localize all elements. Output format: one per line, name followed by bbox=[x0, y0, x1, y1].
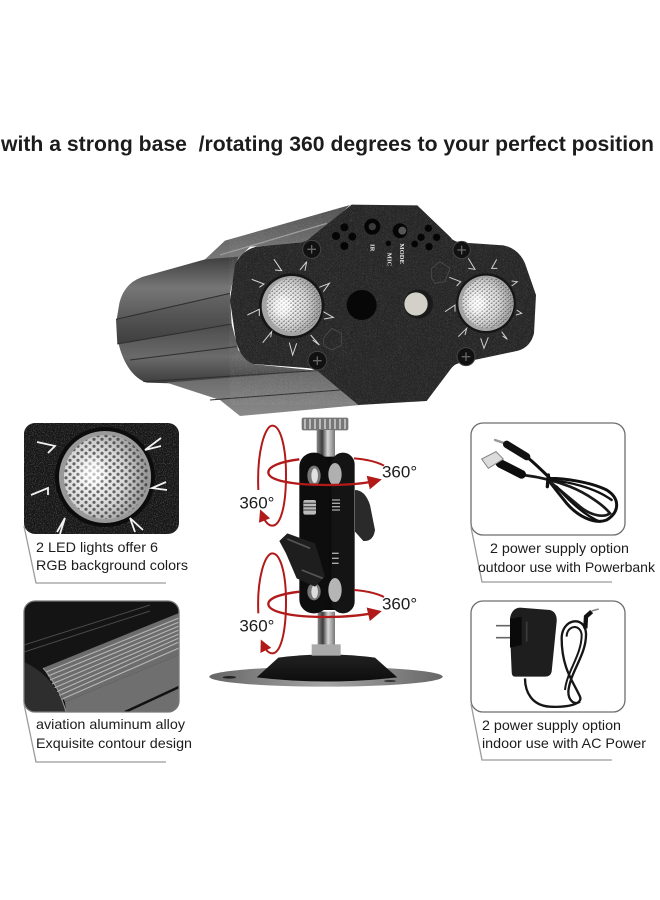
360 degree labels: 360° bbox=[239, 493, 274, 512]
caption: 2 power supply option bbox=[490, 540, 629, 556]
aluminium body bbox=[116, 205, 360, 416]
leader line bbox=[471, 527, 612, 582]
base plate bbox=[209, 654, 443, 687]
caption: indoor use with AC Power bbox=[482, 735, 646, 751]
panel: aluminium alloy bbox=[24, 601, 192, 762]
control labels: MODE bbox=[398, 243, 405, 265]
leader line bbox=[24, 704, 166, 762]
left lens bbox=[247, 259, 333, 355]
360 degree labels bbox=[239, 463, 417, 636]
laser apertures bbox=[347, 289, 433, 320]
caption bbox=[36, 716, 192, 751]
leader line bbox=[471, 704, 612, 760]
panel: USB power cable bbox=[471, 423, 656, 582]
panel border bbox=[24, 601, 179, 712]
icon: USB plug bbox=[482, 452, 503, 468]
360 degree labels: 360° bbox=[239, 617, 274, 636]
right lens bbox=[445, 258, 522, 348]
control labels: IR bbox=[369, 244, 376, 252]
caption: outdoor use with Powerbank bbox=[478, 559, 656, 575]
360 degree labels: 360° bbox=[382, 595, 417, 614]
panel: LED lights bbox=[24, 423, 188, 583]
threaded pole bbox=[302, 418, 348, 656]
icon: wall adapter with cord bbox=[496, 608, 599, 707]
caption: Exquisite contour design bbox=[36, 735, 192, 751]
caption bbox=[478, 540, 656, 575]
caption bbox=[482, 717, 646, 751]
mounting stand bbox=[209, 418, 443, 687]
panel frame bbox=[471, 601, 625, 712]
caption: RGB background colors bbox=[36, 557, 188, 573]
control labels bbox=[369, 243, 405, 267]
red rotation arrows bbox=[258, 426, 384, 653]
caption: aviation aluminum alloy bbox=[36, 716, 185, 732]
caption: 2 power supply option bbox=[482, 717, 621, 733]
LED close-up photo bbox=[24, 423, 179, 534]
icon: USB cable bbox=[482, 440, 617, 522]
leader line bbox=[24, 526, 166, 583]
right thumb knob bbox=[355, 490, 375, 541]
screws bbox=[303, 240, 475, 370]
front plate bbox=[230, 205, 536, 405]
hexagon marks bbox=[323, 262, 450, 350]
controls and speaker holes bbox=[332, 219, 440, 250]
title: with a strong base /rotating 360 degrees to your perfect position bbox=[0, 132, 654, 156]
caption bbox=[36, 539, 188, 573]
caption: 2 LED lights offer 6 bbox=[36, 539, 158, 555]
panel frame bbox=[471, 423, 625, 535]
housing close-up photo bbox=[24, 601, 179, 712]
360 degree labels: 360° bbox=[382, 463, 417, 482]
swivel arm bbox=[299, 453, 355, 613]
left thumb knob bbox=[279, 533, 325, 587]
projector housing bbox=[116, 205, 536, 416]
panel: AC adapter bbox=[471, 601, 646, 760]
control labels: MIC bbox=[385, 253, 392, 267]
